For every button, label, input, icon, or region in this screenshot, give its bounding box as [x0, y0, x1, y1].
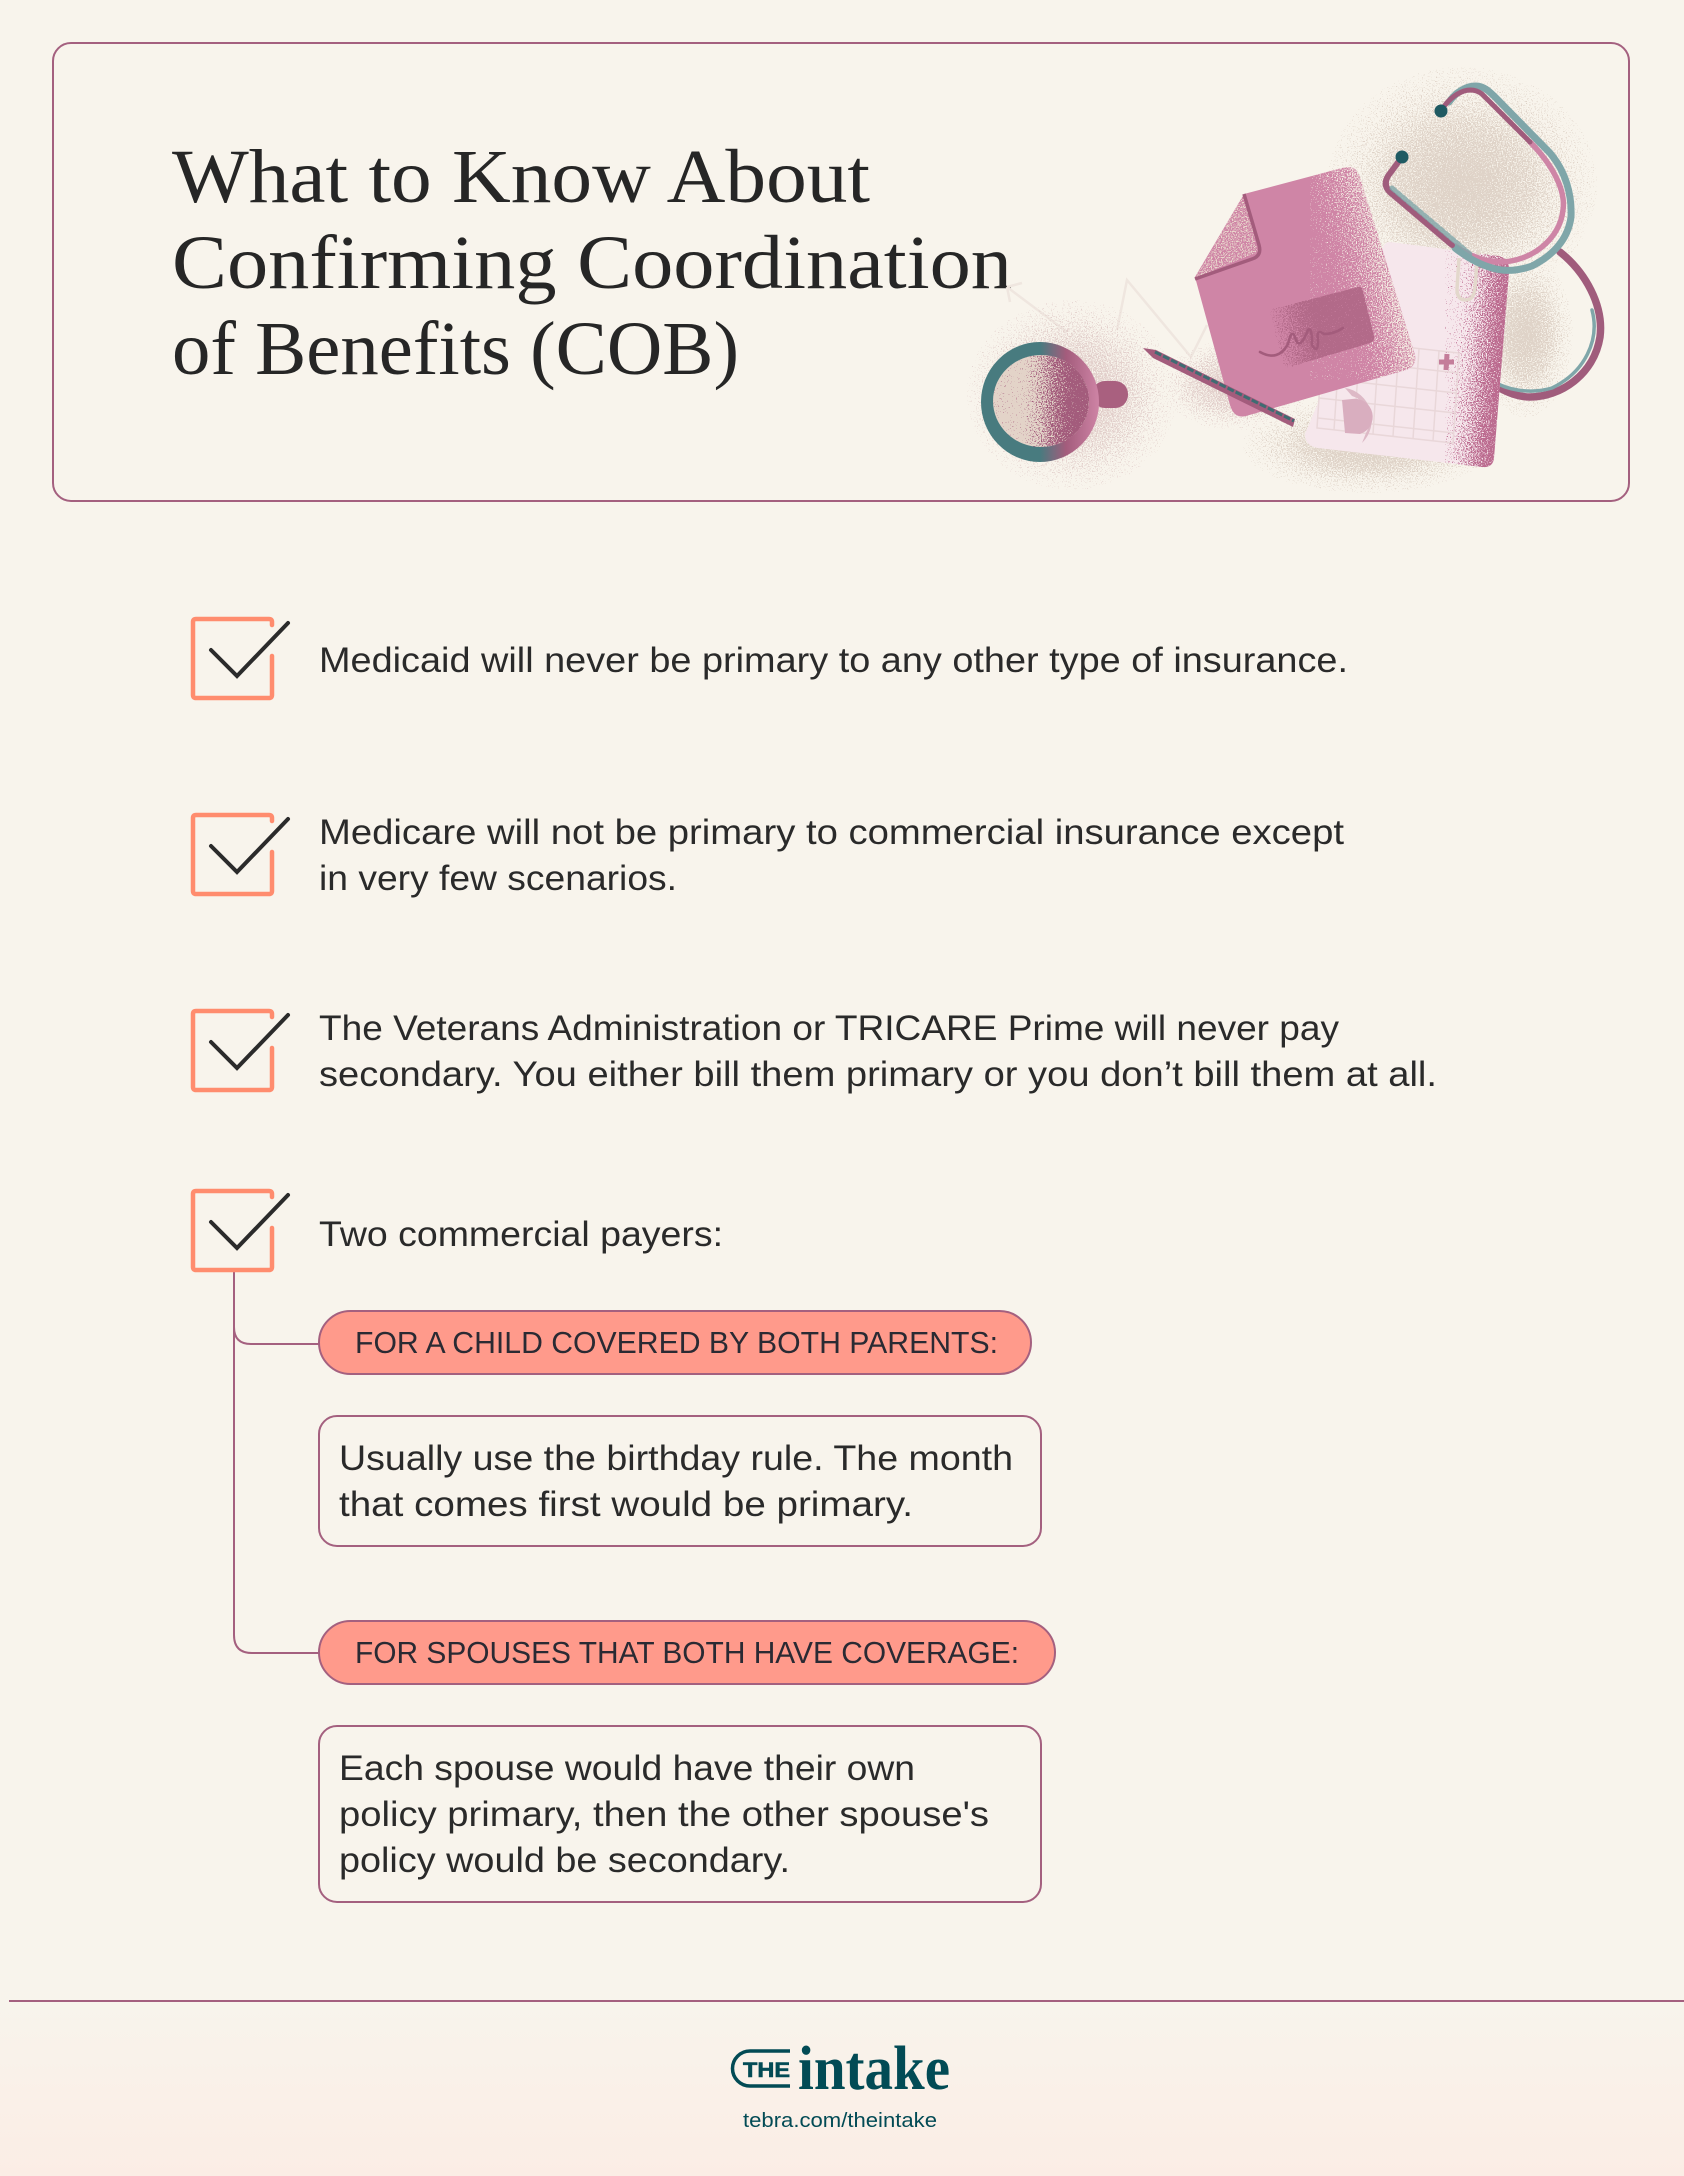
- checkbox: [193, 1011, 288, 1090]
- pill: child covered by both parents: FOR A CHILD COVERED BY BOTH PARENTS:: [355, 1325, 998, 1360]
- item text: [319, 813, 1344, 898]
- mug rim: [981, 342, 1099, 462]
- pen: [1143, 348, 1295, 427]
- speckle cloud below paper: [1243, 397, 1493, 493]
- paper clip: [1457, 250, 1478, 300]
- logo: The Intake: intake: [798, 2035, 950, 2103]
- checkbox: [193, 1191, 288, 1270]
- footer band: [0, 2001, 1684, 2176]
- box: birthday rule: that comes first would be primary.: [339, 1485, 913, 1524]
- footer divider: [9, 2000, 1684, 2002]
- mug: [981, 342, 1128, 462]
- calendar half circle: [1345, 388, 1372, 443]
- title: Confirming Coordination: [172, 221, 1012, 305]
- connector lines: [234, 1272, 319, 1653]
- document with folded corner: [1195, 160, 1420, 417]
- checklist item: Medicaid: [193, 619, 1348, 698]
- item text: secondary. You either bill them primary or you don’t bill them at all.: [319, 1055, 1437, 1094]
- earpieces: [1434, 104, 1448, 118]
- signature panel: [1269, 287, 1374, 367]
- box: spouse policies: policy would be secondary.: [339, 1841, 790, 1880]
- stethoscope lower tube: [1498, 252, 1601, 397]
- item text: [319, 1009, 1437, 1094]
- calendar grid: [1317, 338, 1459, 443]
- mug handle: [1092, 381, 1128, 408]
- illustration: desk with document, stethoscope, mug and pen: [967, 67, 1601, 493]
- panel border: [53, 43, 1629, 501]
- calendar plus mark: [1439, 354, 1454, 370]
- box: birthday rule: [319, 1416, 1041, 1546]
- checkbox: [193, 619, 288, 698]
- title: [172, 135, 1012, 391]
- dark pink tube sections: [1441, 90, 1530, 142]
- outer teal tube: [1449, 86, 1571, 270]
- speckle cloud along pen: [1160, 340, 1310, 430]
- signature: [1260, 328, 1343, 356]
- item text: Medicaid will never be primary to any other type of insurance.: [319, 641, 1348, 680]
- faint background lines: [1007, 280, 1207, 357]
- box: spouse policies: [319, 1726, 1041, 1902]
- paper with calendar: [1305, 240, 1515, 472]
- item text: in very few scenarios.: [319, 859, 677, 898]
- checklist item: Two commercial payers: [193, 1191, 723, 1270]
- logo: The Intake: THE: [743, 2059, 790, 2082]
- pill: child covered by both parents: [319, 1311, 1031, 1374]
- item text: The Veterans Administration or TRICARE Prime will never pay: [319, 1009, 1340, 1048]
- footer url: tebra.com/theintake: [743, 2110, 937, 2132]
- speckle cloud around mug: [967, 300, 1177, 490]
- box: spouse policies: Each spouse would have their own: [339, 1749, 915, 1788]
- logo: The Intake: [732, 2035, 950, 2103]
- title: What to Know About: [172, 135, 870, 219]
- speckle cloud right of paper: [1477, 253, 1573, 417]
- checklist item: Medicare: [193, 813, 1344, 898]
- checklist item: Veterans Administration: [193, 1009, 1437, 1094]
- fold speckle: [1195, 194, 1258, 278]
- title: of Benefits (COB): [172, 307, 739, 391]
- pill: spouses with coverage: [319, 1621, 1055, 1684]
- stethoscope main tube: [1386, 86, 1571, 270]
- checkbox: [193, 815, 288, 894]
- pill: spouses with coverage: FOR SPOUSES THAT BOTH HAVE COVERAGE:: [355, 1635, 1019, 1670]
- box: spouse policies: policy primary, then the other spouse's: [339, 1795, 989, 1834]
- fold crease: [1195, 194, 1260, 279]
- inner pink tube: [1455, 142, 1563, 262]
- header panel: [53, 43, 1629, 501]
- box: birthday rule: Usually use the birthday rule. The month: [339, 1439, 1013, 1478]
- item text: Medicare will not be primary to commercial insurance except: [319, 813, 1344, 852]
- item text: Two commercial payers:: [319, 1215, 723, 1254]
- speckle cloud behind stethoscope: [1327, 67, 1597, 303]
- mug inside: [993, 355, 1089, 447]
